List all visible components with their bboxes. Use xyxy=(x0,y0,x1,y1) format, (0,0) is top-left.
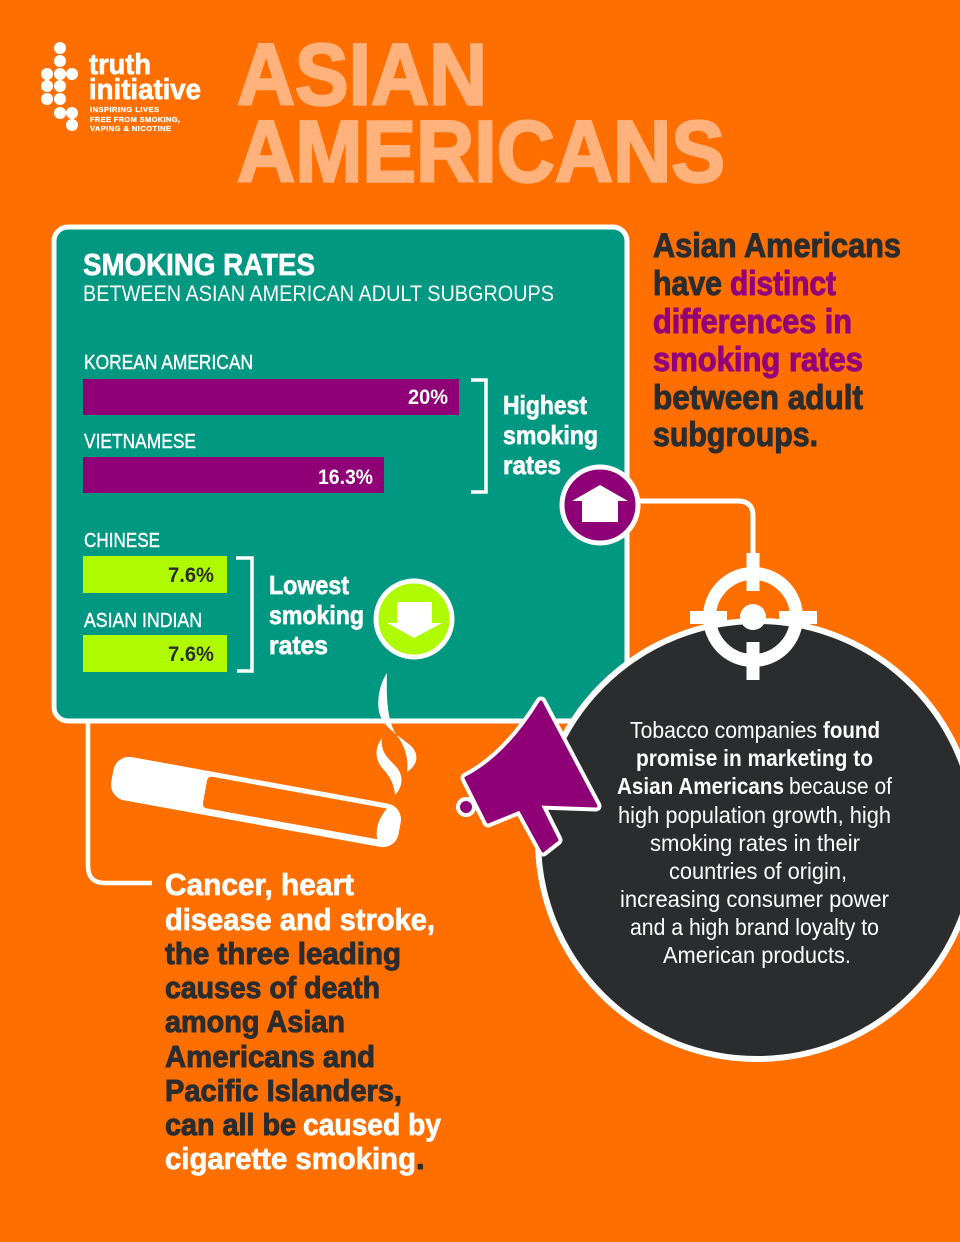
text block: distinct differences: differences in xyxy=(653,303,852,341)
text block: distinct differences: between adult xyxy=(653,379,863,417)
logo wordmark: initiative xyxy=(89,74,201,106)
icon: megaphone xyxy=(458,702,596,851)
circle text: because of xyxy=(789,773,893,799)
label: lowest smoking rates: rates xyxy=(269,630,328,660)
text block: distinct differences: smoking rates xyxy=(653,341,863,379)
icon: crosshair target xyxy=(690,553,817,680)
label: lowest smoking rates xyxy=(269,570,364,660)
text block: distinct differences: subgroups. xyxy=(653,416,818,454)
bar: Korean American: 20% xyxy=(408,386,448,409)
panel: tobacco marketing circle xyxy=(538,621,960,1059)
title: ASIAN xyxy=(237,26,487,124)
label: lowest smoking rates: smoking xyxy=(269,600,364,630)
text block: leading causes of death: among Asian xyxy=(165,1004,345,1039)
circle text: increasing consumer power xyxy=(620,886,889,912)
bar: Vietnamese: VIETNAMESE xyxy=(84,431,196,453)
text block: leading causes of death xyxy=(165,867,442,1176)
connector line: cigarette to text xyxy=(88,720,152,883)
circle text: smoking rates in their xyxy=(650,830,860,856)
icon: down arrow xyxy=(376,581,452,657)
bracket: highest xyxy=(471,380,486,492)
label: highest smoking rates xyxy=(503,390,598,480)
panel background xyxy=(54,227,627,721)
text block: leading causes of death: Pacific Islanders, xyxy=(165,1073,402,1108)
text block: leading causes of death: can all be xyxy=(165,1107,296,1142)
logo wordmark: truth xyxy=(89,49,151,81)
text block: leading causes of death: . xyxy=(416,1141,425,1176)
panel heading: BETWEEN ASIAN AMERICAN ADULT SUBGROUPS xyxy=(83,281,554,306)
logo wordmark xyxy=(89,49,201,133)
circle text: countries of origin, xyxy=(669,858,847,884)
circle text: found xyxy=(823,717,880,743)
text block: leading causes of death: Cancer, heart xyxy=(165,867,354,902)
bar: Korean American xyxy=(83,352,459,415)
text block: leading causes of death: the three leading xyxy=(165,936,401,971)
text block: leading causes of death: causes of death xyxy=(165,970,380,1005)
logo wordmark: VAPING & NICOTINE xyxy=(90,124,171,133)
title xyxy=(237,26,725,200)
logo wordmark: FREE FROM SMOKING, xyxy=(90,115,180,124)
text block: distinct differences: distinct xyxy=(730,265,836,303)
label: lowest smoking rates: Lowest xyxy=(269,570,349,600)
label: highest smoking rates: smoking xyxy=(503,420,598,450)
circle text: Asian Americans xyxy=(617,773,784,799)
logo wordmark: INSPIRING LIVES xyxy=(90,105,159,114)
bar: Chinese: CHINESE xyxy=(84,530,160,552)
icon: dotted arrow xyxy=(41,42,78,131)
text block: leading causes of death: disease and stroke, xyxy=(165,902,435,937)
label: highest smoking rates: Highest xyxy=(503,390,587,420)
bar: Korean American: KOREAN AMERICAN xyxy=(84,352,253,374)
logo: truth initiative xyxy=(41,42,201,133)
circle text: promise in marketing to xyxy=(636,745,873,771)
icon: up arrow xyxy=(562,467,638,543)
panel: smoking rates xyxy=(54,227,627,721)
bar: Chinese: 7.6% xyxy=(168,564,214,587)
bar: Vietnamese xyxy=(83,431,384,493)
icon: cigarette xyxy=(108,754,404,850)
circle text: and a high brand loyalty to xyxy=(630,914,879,940)
bar: Chinese xyxy=(83,530,227,593)
bar: Asian Indian xyxy=(83,610,227,672)
bar: Asian Indian: 7.6% xyxy=(168,643,214,666)
circle text: Tobacco companies xyxy=(630,717,817,743)
label: highest smoking rates: rates xyxy=(503,450,561,480)
text block: distinct differences xyxy=(653,227,901,454)
bar: Vietnamese: 16.3% xyxy=(318,466,373,489)
text block: leading causes of death: caused by xyxy=(303,1107,442,1142)
text block: leading causes of death: cigarette smoking xyxy=(165,1141,416,1176)
connector line: highest rates to target xyxy=(635,501,753,556)
bracket: lowest xyxy=(236,558,252,671)
circle text xyxy=(617,717,893,968)
circle text: American products. xyxy=(663,942,851,968)
text block: distinct differences: have xyxy=(653,265,722,303)
bar: Asian Indian: ASIAN INDIAN xyxy=(84,610,202,632)
panel heading: SMOKING RATES xyxy=(83,247,315,282)
text block: leading causes of death: Americans and xyxy=(165,1039,375,1074)
icon: smoke xyxy=(376,673,416,795)
text block: distinct differences: Asian Americans xyxy=(653,227,901,265)
circle text: high population growth, high xyxy=(618,802,891,828)
title: AMERICANS xyxy=(237,104,725,200)
panel heading xyxy=(83,247,554,306)
circle background xyxy=(538,621,960,1059)
